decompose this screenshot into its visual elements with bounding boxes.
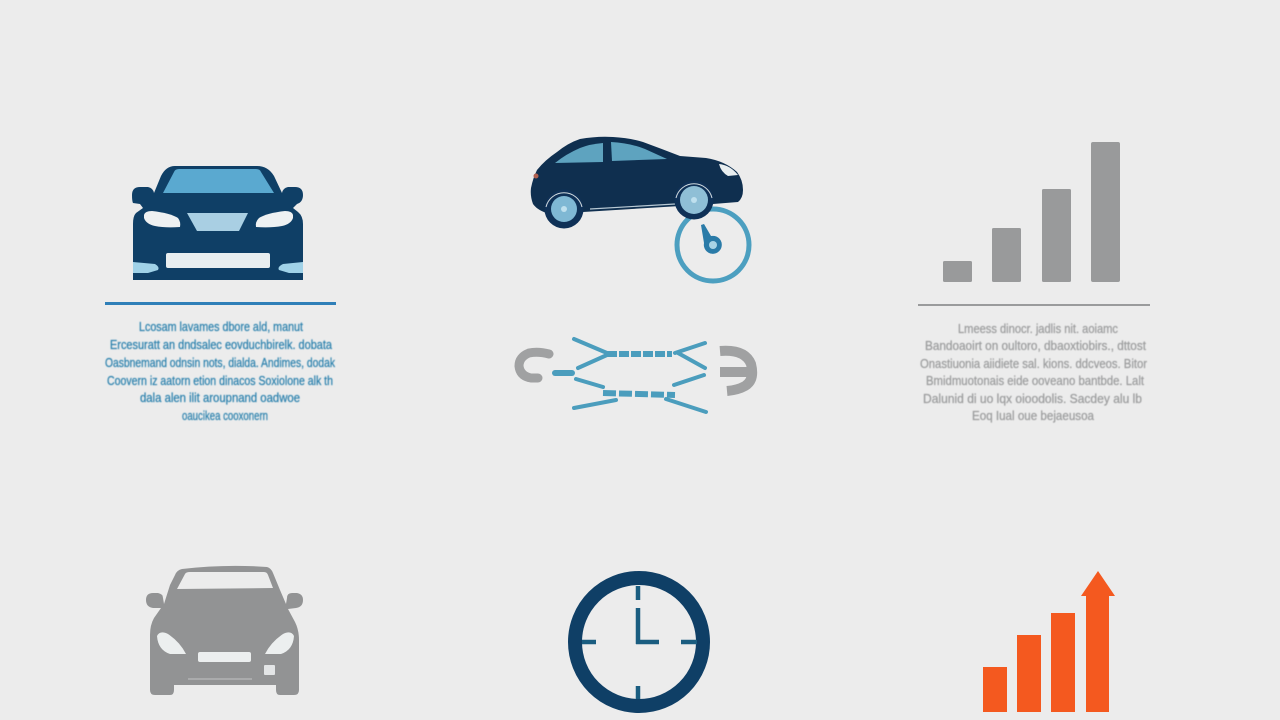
text block: gray paragraph: Eoq Iual oue bejaeusoa xyxy=(972,409,1094,423)
icon: clock xyxy=(575,578,703,706)
text block: blue paragraph xyxy=(105,320,336,423)
text block: gray paragraph: Bandoaoirt on oultoro, dbaoxtiobirs., dttost xyxy=(925,339,1146,353)
text block: blue paragraph: Lcosam lavames dbore ald, manut xyxy=(139,320,303,334)
icon: navy car front view xyxy=(132,166,303,280)
chart: gray bars xyxy=(943,142,1120,282)
chart: orange rising bars with arrow xyxy=(983,571,1115,712)
text block: gray paragraph: Onastiuonia aiidiete sal. kions. ddcveos. Bitor xyxy=(920,357,1147,371)
divider: gray rule xyxy=(918,304,1150,306)
text block: blue paragraph: Ercesuratt an dndsalec eovduchbirelk. dobata xyxy=(110,338,332,352)
text block: gray paragraph xyxy=(920,322,1147,423)
text block: gray paragraph: Lmeess dinocr. jadlis nit. aoiamc xyxy=(958,322,1118,336)
text block: blue paragraph: Oasbnemand odnsin nots, dialda. Andimes, dodak xyxy=(105,356,336,370)
text block: blue paragraph: Coovern iz aatorn etion dinacos Soxiolone alk th xyxy=(107,374,333,388)
text block: blue paragraph: dala alen ilit aroupnand oadwoe xyxy=(140,391,300,405)
icon: gauge circle below side car xyxy=(677,209,749,281)
icon: navy car side view xyxy=(531,137,743,228)
text block: gray paragraph: Bmidmuotonais eide ooveano bantbde. Lalt xyxy=(926,374,1144,388)
text block: gray paragraph: Dalunid di uo lqx oioodolis. Sacdey alu lb xyxy=(923,392,1142,406)
icon: gray car front view xyxy=(146,566,303,695)
text block: blue paragraph: oaucikea cooxonern xyxy=(182,409,268,423)
left gray hook xyxy=(519,352,549,378)
divider: blue rule xyxy=(105,302,336,305)
right gray hook xyxy=(720,351,752,391)
icon: broken chain connector xyxy=(519,339,752,412)
blue chain links xyxy=(555,339,706,412)
